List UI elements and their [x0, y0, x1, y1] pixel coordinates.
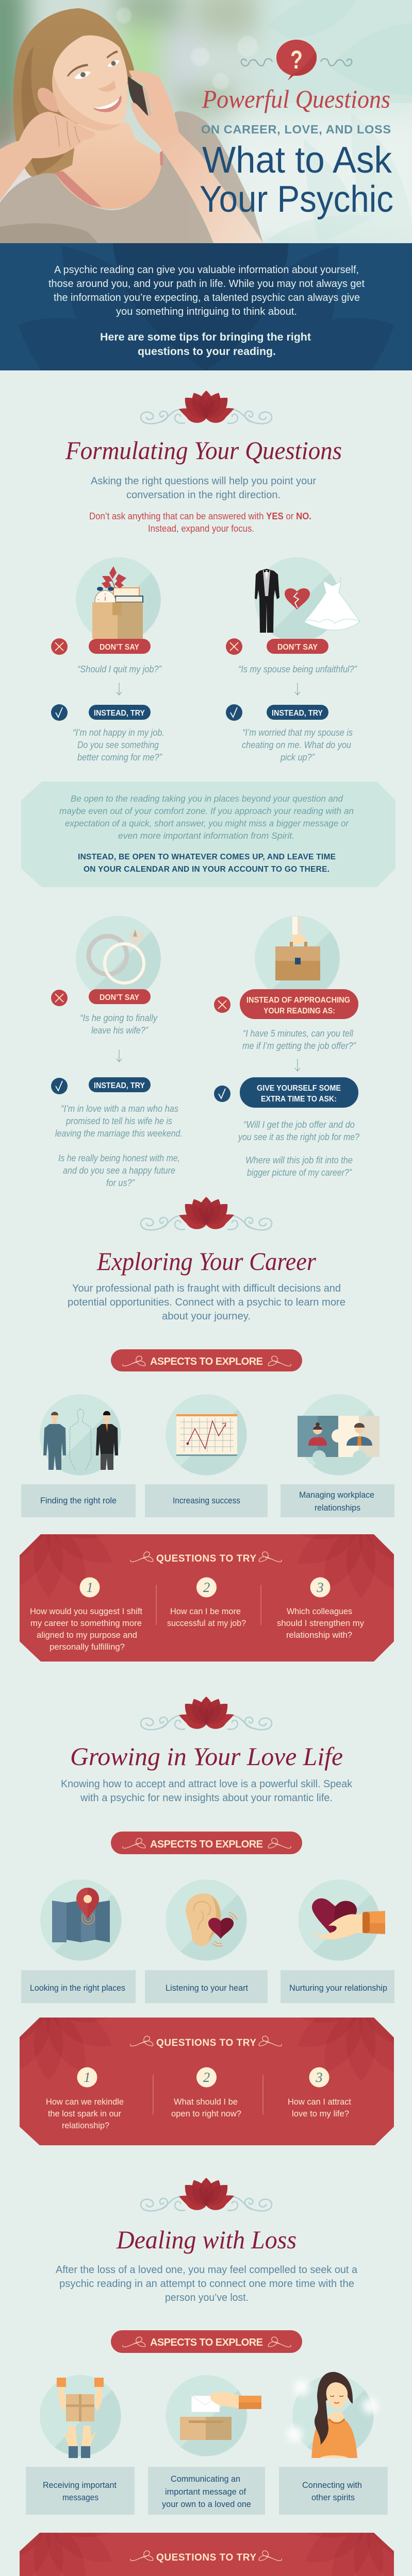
- question 1: How would you suggest I shift: [30, 1606, 142, 1616]
- hero: photo of woman on phone with title: [0, 0, 412, 243]
- question 1: [30, 1578, 142, 1652]
- question 3: relationship with?: [286, 1630, 352, 1640]
- question 3: should I strengthen my: [277, 1618, 364, 1628]
- aspect: finding the right role: [40, 1394, 121, 1476]
- card: quit job: [51, 557, 164, 762]
- label boxes: Finding the right role: [40, 1496, 117, 1505]
- aspect: heart in hand: [298, 1879, 385, 1961]
- section: Exploring Your Career: [0, 1196, 412, 1662]
- question 1: [46, 2067, 124, 2130]
- section: Growing in Your Love Life: [0, 1696, 412, 2145]
- lotus ornament: [141, 1196, 272, 1230]
- lotus ornament: [141, 2177, 272, 2211]
- finger creases: [55, 116, 80, 147]
- panel heading: QUESTIONS TO TRY: [156, 2038, 256, 2048]
- section intro: potential opportunities. Connect with a psychic to learn more: [68, 1297, 345, 1308]
- section intro: Your professional path is fraught with difficult decisions and: [72, 1283, 341, 1294]
- intro paragraph: A psychic reading can give you valuable information about yourself,: [54, 264, 359, 276]
- band lotus petals: [19, 243, 394, 370]
- dividers: [156, 1585, 261, 1625]
- heading: Exploring Your Career: [96, 1247, 316, 1276]
- broken heart: [285, 588, 310, 609]
- better question: Do you see something: [77, 740, 159, 750]
- pill: aspects to explore: ASPECTS TO EXPLORE: [150, 1839, 263, 1850]
- pink strap: [55, 171, 102, 207]
- left forearm and hand: [0, 112, 95, 201]
- pill: instead try: INSTEAD, TRY: [94, 1081, 145, 1090]
- italic advice: maybe even out of your comfort zone. If you approach your reading with an: [59, 806, 354, 816]
- better question: [237, 1120, 359, 1178]
- label boxes: [21, 1484, 394, 1517]
- pill: instead of approaching: [240, 989, 358, 1019]
- callout panel: be open: [21, 782, 395, 887]
- title: Powerful Questions: Powerful Questions: [202, 84, 390, 113]
- lotus ornament: [141, 1696, 272, 1730]
- question 3: How can I attract: [288, 2097, 351, 2107]
- subtitle: ON CAREER, LOVE, AND LOSS: [201, 123, 391, 136]
- hair shadow: [22, 46, 67, 175]
- better question: leaving the marriage this weekend.: [55, 1128, 183, 1139]
- bold advice: INSTEAD, BE OPEN TO WHATEVER COMES UP, AND LEAVE TIME: [78, 853, 336, 861]
- panel heading: [130, 2551, 282, 2563]
- quote: “Is my spouse being unfaithful?”: [238, 664, 357, 674]
- section intro: [68, 1283, 345, 1322]
- quote: [242, 1028, 356, 1051]
- cheek shade: [52, 72, 121, 131]
- blurred garden background: [0, 0, 412, 210]
- question 2: open to right now?: [171, 2109, 241, 2119]
- better question: [55, 1104, 183, 1188]
- question 1: 1: [84, 2070, 91, 2085]
- italic advice: expectation of a quick, short answer, you might miss a bigger message or: [65, 818, 349, 828]
- hair back: [13, 8, 134, 177]
- question 2: 2: [203, 1580, 210, 1595]
- pill: instead of approaching: YOUR READING AS:: [263, 1007, 335, 1015]
- better question: bigger picture of my career?”: [247, 1167, 352, 1178]
- aspect: map pin: [40, 1879, 122, 1961]
- bold advice: [78, 853, 336, 874]
- label boxes: Connecting with: [302, 2481, 362, 2490]
- aspect: connecting with spirits: [287, 2372, 378, 2458]
- intro band: [0, 243, 412, 370]
- better question: for us?”: [106, 1178, 135, 1188]
- intro callout: Here are some tips for bringing the right: [100, 331, 311, 343]
- card: leave his wife: [51, 916, 183, 1188]
- italic advice: even more important information from Spirit.: [118, 831, 294, 841]
- section intro: Knowing how to accept and attract love is a powerful skill. Speak: [61, 1778, 353, 1790]
- ear: [38, 88, 58, 112]
- section intro: After the loss of a loved one, you may feel compelled to seek out a: [56, 2264, 358, 2276]
- panel: questions to try: [20, 2533, 394, 2576]
- label boxes: Listening to your heart: [166, 1984, 248, 1993]
- better question: you see it as the right job for me?: [237, 1132, 359, 1142]
- heading: Formulating Your Questions: [65, 436, 342, 465]
- section intro: with a psychic for new insights about your romantic life.: [80, 1792, 333, 1804]
- aspect: receiving package: [40, 2375, 121, 2458]
- label boxes: Increasing success: [173, 1496, 240, 1505]
- nose: [98, 80, 116, 92]
- panel: questions to try: [20, 2018, 394, 2145]
- eyes: [74, 60, 120, 79]
- question 2: [167, 1578, 246, 1628]
- icon: check: [51, 704, 68, 721]
- aspect: sending message: [166, 2375, 261, 2456]
- label boxes: your own to a loved one: [162, 2500, 251, 2509]
- icon: check: [51, 1078, 68, 1094]
- question 3: 3: [315, 2070, 323, 2085]
- chest and neck: [55, 123, 162, 209]
- arrow: [117, 1049, 122, 1062]
- label boxes: other spirits: [311, 2493, 355, 2502]
- title: What to Ask: What to Ask: [202, 140, 392, 181]
- white couch: [31, 226, 83, 243]
- pill: aspects to explore: ASPECTS TO EXPLORE: [150, 1356, 263, 1367]
- better question: “I’m worried that my spouse is: [242, 727, 353, 738]
- brows: [67, 50, 118, 77]
- quote: [80, 1013, 158, 1036]
- section intro: psychic reading in an attempt to connect one more time with the: [59, 2278, 354, 2290]
- label boxes: Communicating an: [171, 2475, 240, 2484]
- better question: “Will I get the job offer and do: [243, 1120, 355, 1130]
- fade behind title: [232, 103, 412, 243]
- phone: [128, 76, 149, 116]
- pill: don't say: DON’T SAY: [100, 643, 140, 652]
- question 1: the lost spark in our: [48, 2109, 121, 2119]
- card: unfaithful spouse: [226, 557, 360, 762]
- pill: don't say: [89, 639, 151, 654]
- heading: Growing in Your Love Life: [70, 1742, 343, 1771]
- icon: rings: [76, 916, 161, 1001]
- quote: “I have 5 minutes, can you tell: [243, 1028, 354, 1039]
- icon: box with clock, books and plant: [76, 557, 161, 642]
- pill: don't say: [267, 639, 328, 654]
- label boxes: Managing workplace: [299, 1490, 374, 1500]
- panel heading: [130, 1552, 282, 1564]
- pill: don't say: DON’T SAY: [100, 993, 140, 1002]
- aspect: ear and heart: [166, 1879, 247, 1961]
- title: Your Psychic: Your Psychic: [200, 179, 393, 220]
- mouth: [93, 95, 122, 112]
- icon: briefcase and hand: [255, 916, 340, 1001]
- section: Formulating Your Questions: [65, 389, 342, 534]
- icon: cross: [226, 638, 242, 655]
- shirt: [0, 111, 263, 243]
- question bubble: ?: [290, 45, 303, 74]
- phone hand: [129, 70, 182, 143]
- pill: instead of approaching: INSTEAD OF APPROACHING: [246, 996, 350, 1005]
- section intro: Asking the right questions will help you point your: [91, 476, 316, 487]
- section: Dealing with Loss: [0, 2177, 412, 2576]
- question 2: What should I be: [174, 2097, 238, 2107]
- decorative teal petals: [263, 121, 411, 243]
- section intro: conversation in the right direction.: [126, 489, 281, 501]
- pill: don't say: [89, 989, 151, 1004]
- better question: [242, 727, 353, 762]
- question 3: 3: [316, 1580, 324, 1595]
- intro paragraph: you something intriguing to think about.: [116, 306, 297, 317]
- pill: aspects to explore: [111, 1349, 302, 1371]
- yes/no warning: [89, 511, 311, 534]
- dress: [304, 577, 360, 630]
- quote: “Is he going to finally: [80, 1013, 158, 1023]
- pill: aspects to explore: [111, 2330, 302, 2353]
- yes/no warning: Don’t ask anything that can be answered with YES or NO.: [89, 511, 311, 521]
- question 3: love to my life?: [292, 2109, 349, 2119]
- quote: “Should I quit my job?”: [77, 664, 162, 674]
- intro paragraph: the information you’re expecting, a talented psychic can always give: [54, 292, 360, 303]
- label boxes: Receiving important: [43, 2481, 117, 2490]
- ornament swirls: [241, 59, 352, 66]
- question bubble: [276, 40, 317, 80]
- question 1: relationship?: [62, 2121, 109, 2130]
- arrow: [117, 683, 122, 695]
- intro paragraph: those around you, and your path in life. While you may not always get: [48, 278, 365, 290]
- icon: check: [214, 1086, 230, 1102]
- icon: tuxedo, broken heart, wedding dress: [255, 557, 360, 642]
- pill: don't say: DON’T SAY: [277, 643, 318, 652]
- pill: give yourself time: EXTRA TIME TO ASK:: [261, 1095, 337, 1104]
- pill: instead try: [89, 1077, 151, 1092]
- lotus ornament: [141, 389, 272, 424]
- italic advice: Be open to the reading taking you in places beyond your question and: [71, 793, 343, 804]
- face: [52, 36, 127, 130]
- arrow: [295, 683, 300, 695]
- label boxes: [26, 2467, 388, 2515]
- better question: cheating on me. What do you: [242, 740, 351, 750]
- label boxes: [21, 1970, 394, 2003]
- pill: instead try: [267, 705, 328, 720]
- question 1: How can we rekindle: [46, 2097, 124, 2107]
- quote: leave his wife?”: [91, 1025, 149, 1036]
- panel heading: QUESTIONS TO TRY: [156, 1553, 256, 1564]
- heading: Dealing with Loss: [116, 2225, 296, 2254]
- better question: Where will this job fit into the: [245, 1155, 353, 1165]
- better question: and do you see a happy future: [63, 1165, 175, 1176]
- better question: pick up?”: [280, 752, 315, 762]
- better question: “I’m in love with a man who has: [61, 1104, 178, 1114]
- label boxes: messages: [62, 2493, 98, 2502]
- better question: promised to tell his wife he is: [65, 1116, 172, 1126]
- question 3: [277, 1578, 364, 1640]
- question 1: aligned to my purpose and: [37, 1630, 137, 1640]
- section intro: person you’ve lost.: [165, 2292, 249, 2303]
- card: job offer: [214, 916, 359, 1178]
- question 3: [288, 2067, 351, 2119]
- pill: instead try: [89, 705, 151, 720]
- label boxes: important message of: [165, 2487, 246, 2497]
- intro paragraph: [48, 264, 365, 317]
- pill: aspects to explore: [111, 1832, 302, 1854]
- quote: me if I’m getting the job offer?”: [242, 1041, 356, 1051]
- label boxes: Looking in the right places: [30, 1984, 125, 1993]
- section intro: [61, 1778, 353, 1804]
- light bokeh circles: [116, 8, 258, 90]
- tuxedo: [255, 569, 279, 633]
- pill: give yourself time: [240, 1077, 358, 1108]
- better question: better coming for me?”: [77, 752, 162, 762]
- icon: cross: [51, 990, 68, 1006]
- icon: cross: [214, 996, 230, 1013]
- pill: instead try: INSTEAD, TRY: [272, 709, 323, 718]
- icon: check: [226, 704, 242, 721]
- question 2: successful at my job?: [167, 1618, 246, 1628]
- label boxes: relationships: [315, 1503, 360, 1513]
- shirt shade: [0, 223, 98, 243]
- woman: [0, 8, 263, 243]
- section intro: [91, 476, 316, 501]
- intro callout: questions to your reading.: [138, 346, 276, 358]
- panel: questions to try: [20, 1534, 394, 1662]
- forearm right: [155, 134, 263, 243]
- question 3: Which colleagues: [287, 1606, 352, 1616]
- pill: aspects to explore: ASPECTS TO EXPLORE: [150, 2337, 263, 2348]
- question 2: How can I be more: [170, 1606, 241, 1616]
- label boxes: Nurturing your relationship: [289, 1984, 387, 1993]
- men and outline: [43, 1424, 66, 1470]
- intro callout: [100, 331, 311, 358]
- italic advice: [59, 793, 354, 841]
- aspect: increasing success: [166, 1394, 247, 1476]
- section intro: about your journey.: [162, 1311, 251, 1322]
- arrow: [295, 1059, 300, 1071]
- pill: instead try: INSTEAD, TRY: [94, 709, 145, 718]
- section intro: [56, 2264, 358, 2303]
- aspect: workplace relationships: [298, 1394, 380, 1476]
- better question: [73, 727, 164, 762]
- question 1: my career to something more: [30, 1618, 142, 1628]
- icon: cross: [51, 638, 68, 655]
- question 1: 1: [86, 1580, 93, 1595]
- pill: give yourself time: GIVE YOURSELF SOME: [257, 1084, 341, 1093]
- dividers: [153, 2075, 263, 2115]
- bold advice: ON YOUR CALENDAR AND IN YOUR ACCOUNT TO GO THERE.: [84, 865, 329, 874]
- question 2: 2: [203, 2070, 210, 2085]
- yes/no warning: Instead, expand your focus.: [148, 523, 254, 534]
- panel heading: QUESTIONS TO TRY: [156, 2552, 256, 2563]
- question 1: personally fulfilling?: [50, 1642, 125, 1652]
- better question: “I’m not happy in my job.: [73, 727, 164, 738]
- better question: Is he really being honest with me,: [58, 1153, 180, 1163]
- question 2: [171, 2067, 241, 2119]
- panel heading: [130, 2036, 282, 2048]
